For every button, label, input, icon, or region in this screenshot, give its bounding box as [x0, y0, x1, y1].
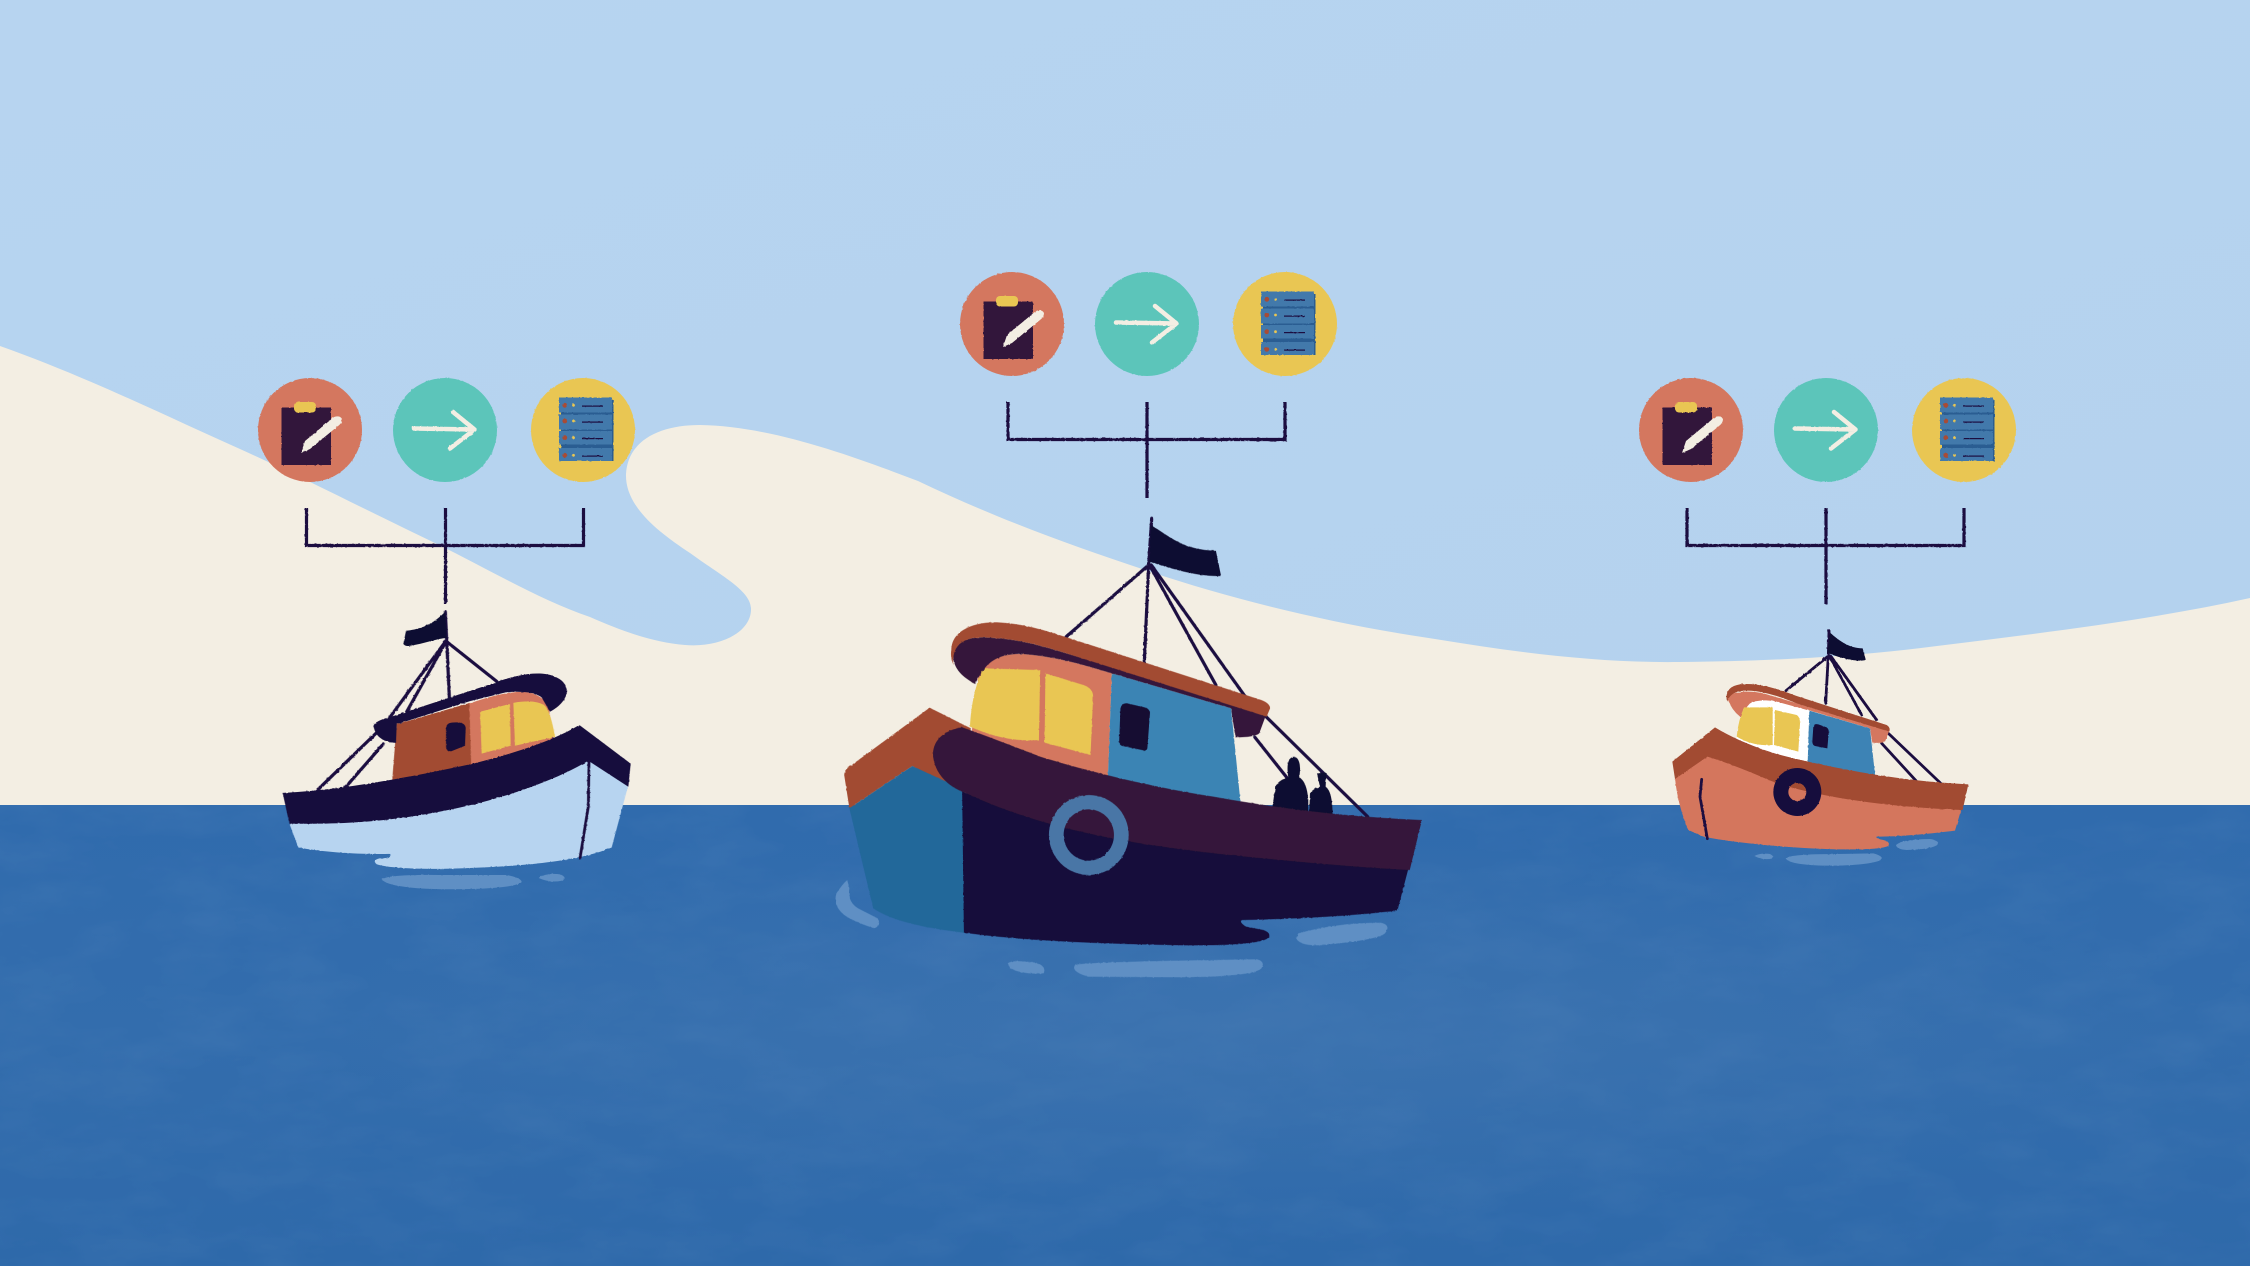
- hull: [1672, 727, 1968, 849]
- people: [1272, 757, 1333, 817]
- mast and rigging: [1066, 518, 1368, 817]
- cabin: [1726, 684, 1890, 790]
- background: sky: [0, 0, 2250, 810]
- mast and rigging: [1786, 631, 1940, 783]
- left bracket connector: [306, 508, 584, 604]
- hull: [283, 725, 631, 869]
- icon: server rack: [531, 378, 635, 482]
- water ripples: [1754, 839, 1938, 866]
- icon: arrow: [393, 378, 497, 482]
- right bracket connector: [1687, 508, 1964, 604]
- icon: arrow: [1774, 378, 1878, 482]
- hull: [844, 708, 1422, 945]
- centre boat: [836, 518, 1422, 977]
- icon: server rack: [1233, 272, 1337, 376]
- icon: clipboard and pencil: [1639, 378, 1743, 482]
- centre bracket connector: [1008, 402, 1285, 498]
- icon: clipboard and pencil: [960, 272, 1064, 376]
- icon: clipboard and pencil: [258, 378, 362, 482]
- background: sea: [0, 805, 2250, 1266]
- left icon group: [258, 378, 635, 482]
- cabin: [373, 674, 567, 799]
- mast and rigging: [316, 612, 497, 791]
- cabin: [951, 622, 1270, 817]
- icon: arrow: [1095, 272, 1199, 376]
- background: sand wave: [0, 346, 2250, 806]
- left boat: [283, 612, 631, 889]
- water ripples: [382, 874, 565, 889]
- water ripples: [836, 880, 1387, 977]
- right boat: [1672, 631, 1968, 866]
- icon: server rack: [1912, 378, 2016, 482]
- right icon group: [1639, 378, 2016, 482]
- centre icon group: [960, 272, 1337, 376]
